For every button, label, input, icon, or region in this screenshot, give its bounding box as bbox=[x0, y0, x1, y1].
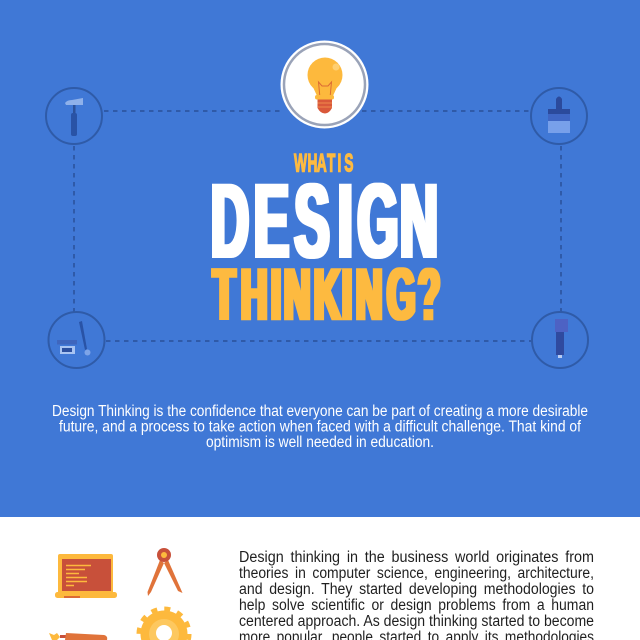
body paragraph: Design thinking in the business world originates from bbox=[239, 549, 594, 566]
body paragraph: and design. They started developing methodologies to bbox=[239, 581, 594, 598]
panel: white body bbox=[0, 517, 640, 640]
icon: gear bbox=[139, 609, 189, 640]
body paragraph: centered approach. As design thinking started to become bbox=[239, 613, 594, 630]
icon: ruler and pen bbox=[48, 312, 104, 368]
icon: marker bbox=[532, 312, 588, 368]
icon: hammer bbox=[46, 88, 102, 144]
body paragraph: theories in computer science, engineering, architecture, bbox=[239, 565, 594, 582]
icon: paint brush bbox=[531, 88, 587, 144]
icon: compass bbox=[148, 548, 182, 596]
icon: light bulb bbox=[280, 40, 368, 128]
intro paragraph bbox=[52, 403, 588, 451]
icon: laptop bbox=[55, 554, 117, 598]
heading: thinking: THINKING? bbox=[213, 255, 440, 336]
intro paragraph: optimism is well needed in education. bbox=[206, 434, 434, 451]
intro paragraph: future, and a process to take action when faced with a difficult challenge. That kind of bbox=[59, 418, 582, 436]
body paragraph: help solve scientific or design problems from a human bbox=[239, 597, 594, 614]
heading: design: DESIGN bbox=[211, 162, 438, 280]
body paragraph bbox=[239, 549, 594, 640]
icon: paint brush bottom bbox=[49, 633, 107, 640]
heading: what is: WHAT IS bbox=[294, 150, 353, 178]
